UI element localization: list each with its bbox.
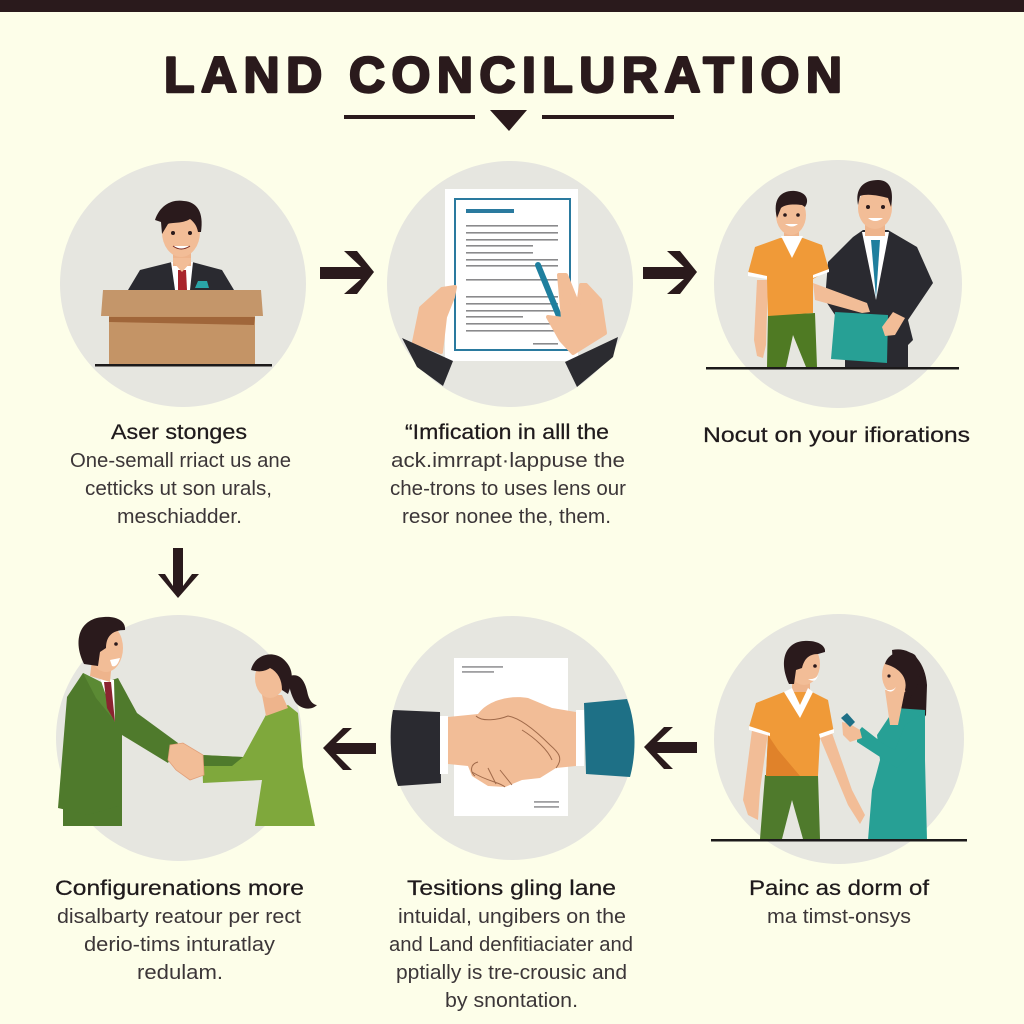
icon: man in orange shirt <box>748 191 870 367</box>
icon: clasped hands <box>168 743 204 780</box>
top bar <box>0 0 1024 12</box>
text: step 1 <box>70 420 291 528</box>
circle <box>714 160 962 408</box>
text: step 5 <box>389 876 633 1012</box>
icon: white cuffs <box>440 710 584 774</box>
icon: document <box>454 658 568 816</box>
arrow: step 6 to 5 <box>644 727 697 769</box>
text: step 1: meschiadder. <box>117 506 242 528</box>
icon: teal folder <box>831 312 888 363</box>
title divider with triangle <box>344 110 674 131</box>
text: step 2: che-trons to uses lens our <box>390 478 626 500</box>
panel: step 3 two men with folder <box>706 160 962 408</box>
icon: man in green suit <box>58 617 178 826</box>
icon: teal cuff <box>584 699 635 777</box>
text: step 6: Painc as dorm of <box>749 876 929 900</box>
text: step 1: One-semall rriact us ane <box>70 450 291 472</box>
text: step 6: ma timst-onsys <box>767 906 911 928</box>
icon: suit hand <box>882 312 905 336</box>
title: LAND CONCILURATION <box>164 47 842 103</box>
panel: step 4 handshake of two people <box>56 615 317 861</box>
icon: dark cuff <box>391 710 441 786</box>
text: step 3: Nocut on your ifiorations <box>703 423 970 447</box>
panel: step 5 handshake over document <box>390 616 635 860</box>
text: step 5: intuidal, ungibers on the <box>398 906 626 928</box>
text: step 2: “Imfication in alll the <box>405 420 609 444</box>
icon: man in suit <box>825 180 933 367</box>
panel: step 1 podium speaker <box>60 161 306 407</box>
arrow: step 2 to 3 <box>643 251 697 294</box>
text: step 4: Configurenations more <box>55 876 304 900</box>
text: step 1: Aser stonges <box>111 420 247 444</box>
text: step 5: pptially is tre-crousic and <box>396 962 627 984</box>
arrow: step 1 to 2 <box>320 251 374 294</box>
arrow: step 5 to 4 <box>323 728 376 770</box>
text: step 4 <box>55 876 304 984</box>
icon: right hand and sleeve <box>548 275 618 387</box>
text: step 6 <box>749 876 929 928</box>
text: step 2: ack.imrrapt·lappuse the <box>391 450 625 472</box>
text: step 4: derio-tims inturatlay <box>84 934 275 956</box>
icon: pen <box>538 265 561 321</box>
circle <box>60 161 306 407</box>
panel: step 6 man and woman talking <box>711 614 967 864</box>
icon: handshake <box>448 697 576 787</box>
icon: woman in teal dress <box>841 649 927 840</box>
icon: man in orange shirt <box>743 641 865 839</box>
text: step 5: and Land denfitiaciater and <box>389 934 633 956</box>
circle <box>387 161 633 407</box>
circle <box>390 616 634 860</box>
icon: speaker <box>128 201 234 290</box>
circle <box>714 614 964 864</box>
icon: left hand and sleeve <box>402 287 455 386</box>
icon: woman in green top <box>202 654 317 826</box>
text: step 2 <box>390 420 626 528</box>
text: step 4: disalbarty reatour per rect <box>57 906 301 928</box>
icon: document <box>445 189 578 361</box>
circle <box>56 615 302 861</box>
arrow: down <box>158 548 199 598</box>
panel: step 2 document signing <box>387 161 633 407</box>
text: step 2: resor nonee the, them. <box>402 506 611 528</box>
text: step 4: redulam. <box>137 962 223 984</box>
text: step 5: by snontation. <box>445 990 578 1012</box>
text: step 1: cetticks ut son urals, <box>85 478 272 500</box>
text: step 5: Tesitions gling lane <box>407 876 616 900</box>
icon: podium box <box>101 290 263 365</box>
